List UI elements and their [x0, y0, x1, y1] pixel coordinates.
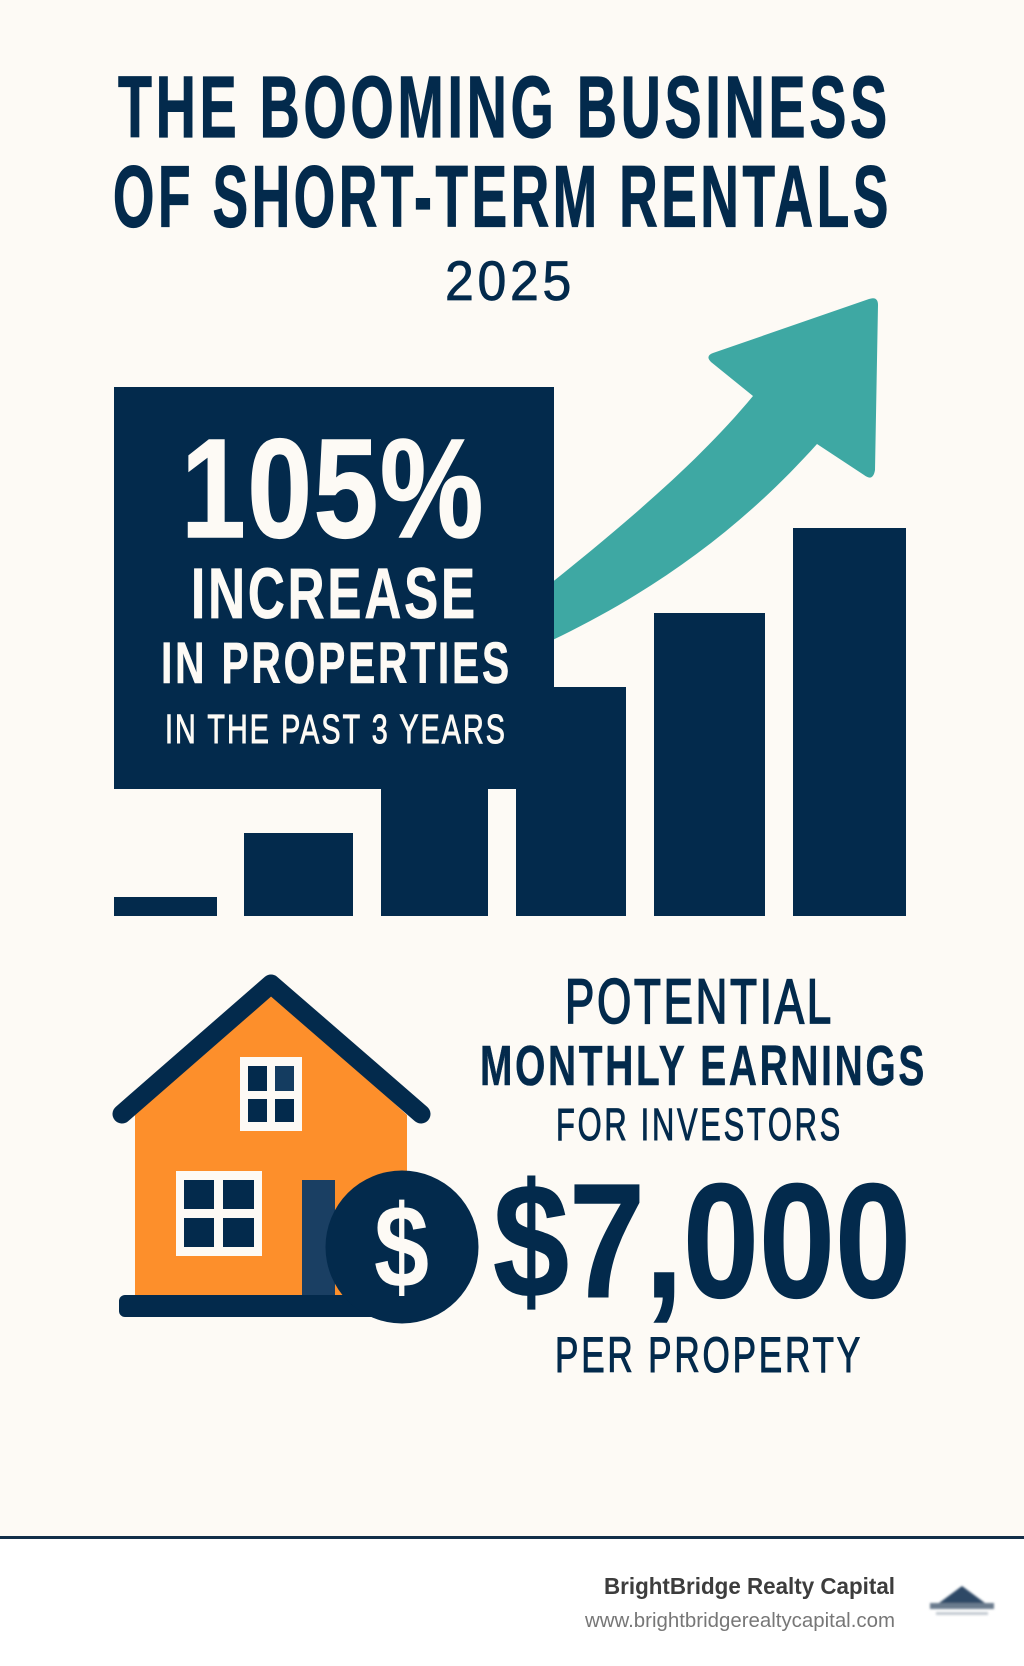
roof	[122, 984, 421, 1114]
label: potential: POTENTIAL	[565, 967, 834, 1037]
ground	[119, 1295, 389, 1317]
growth arrow	[540, 298, 878, 646]
company name: BrightBridge Realty Capital	[604, 1573, 895, 1599]
house body	[135, 990, 407, 1295]
dollar coin: $	[374, 1181, 429, 1313]
label: for investors: FOR INVESTORS	[556, 1099, 843, 1150]
dollar coin	[326, 1170, 478, 1324]
bar chart	[114, 528, 906, 916]
title	[113, 59, 892, 246]
label: in properties: IN PROPERTIES	[161, 631, 512, 696]
statistic: $7,000: $7,000	[493, 1149, 911, 1332]
icon: house with dollar coin	[119, 984, 478, 1324]
footer	[0, 1536, 1024, 1666]
statistic: 105%: 105%	[181, 409, 485, 567]
website: www.brightbridgerealtycapital.com	[584, 1610, 895, 1632]
door	[302, 1180, 335, 1295]
lower window	[176, 1171, 262, 1256]
label: per property: PER PROPERTY	[555, 1327, 863, 1383]
icon: company logo	[930, 1586, 994, 1615]
panel: 105% increase callout	[114, 387, 626, 789]
panel: monthly earnings	[480, 967, 927, 1383]
label: increase: INCREASE	[191, 555, 478, 634]
subtitle: year: 2025	[445, 249, 575, 312]
upper window	[240, 1057, 302, 1131]
label: in the past 3 years: IN THE PAST 3 YEARS	[165, 706, 507, 752]
